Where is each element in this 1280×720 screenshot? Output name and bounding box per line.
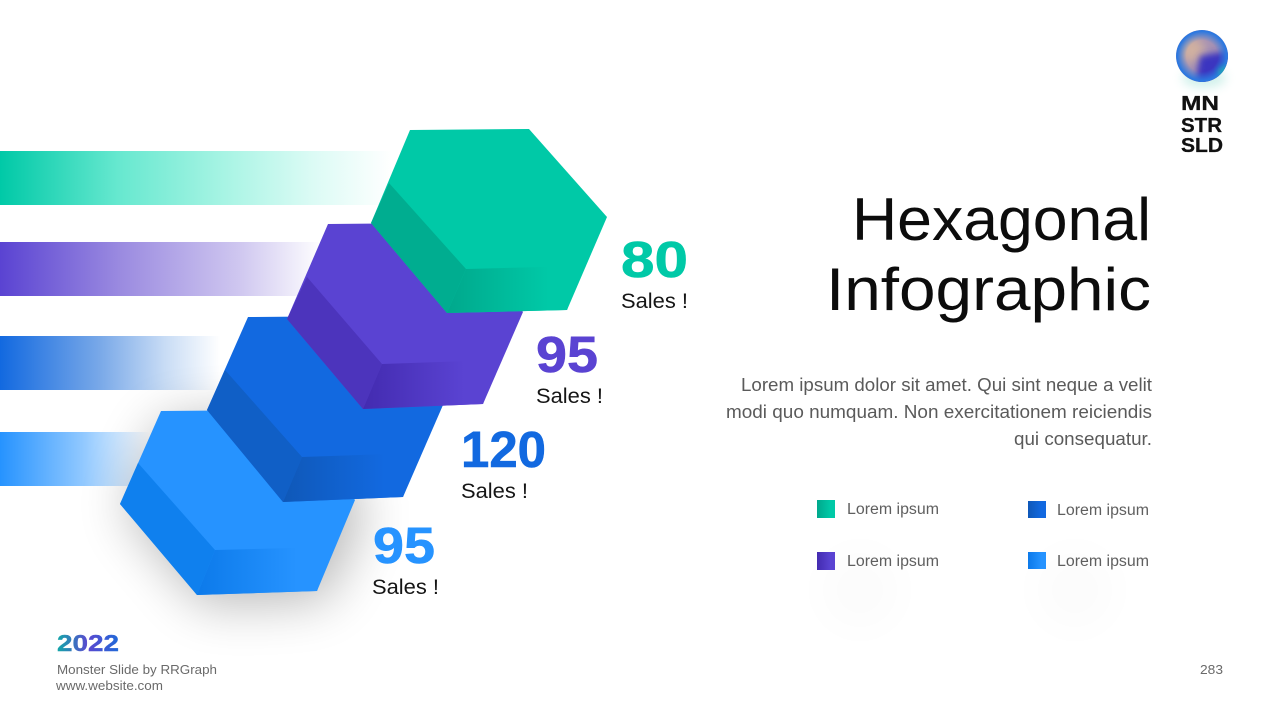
value: 120 sales: Sales ! bbox=[461, 480, 528, 503]
value: 95 sales purple: 95 bbox=[536, 326, 598, 383]
value: 95 sales purple bbox=[536, 326, 603, 408]
legend item: purple bbox=[817, 552, 939, 570]
hexagon: green bbox=[371, 129, 607, 313]
legend item: blue: Lorem ipsum bbox=[1057, 502, 1149, 519]
hexagon shadow bbox=[125, 415, 365, 605]
stripe: purple bbox=[0, 242, 322, 296]
value: 80 sales bbox=[621, 231, 688, 313]
title: Infographic bbox=[826, 256, 1151, 323]
logo text: MN bbox=[1181, 93, 1219, 115]
legend item: purple: Lorem ipsum bbox=[847, 553, 939, 570]
value: 120 sales bbox=[461, 421, 546, 503]
stripe: blue bbox=[0, 336, 220, 390]
value: 95 sales purple: Sales ! bbox=[536, 385, 603, 408]
value: 95 sales light blue bbox=[372, 517, 439, 599]
footer: credits: Monster Slide by RRGraph bbox=[57, 662, 217, 677]
footer: credits bbox=[55, 662, 217, 693]
faint shadows below legend bbox=[818, 548, 1117, 632]
value: 95 sales light blue: Sales ! bbox=[372, 576, 439, 599]
hexagon: purple bbox=[287, 223, 523, 409]
legend item: light blue: Lorem ipsum bbox=[1057, 553, 1149, 570]
value: 120 sales: 120 bbox=[461, 421, 546, 478]
logo bbox=[1176, 30, 1232, 157]
legend item: green bbox=[817, 500, 939, 518]
value: 80 sales: Sales ! bbox=[621, 290, 688, 313]
title: Hexagonal bbox=[852, 186, 1151, 253]
value: 80 sales: 80 bbox=[621, 231, 688, 288]
legend item: light blue bbox=[1028, 552, 1149, 570]
footer: year: 2022 bbox=[57, 630, 119, 656]
value: 95 sales light blue: 95 bbox=[373, 517, 435, 574]
legend item: blue bbox=[1028, 501, 1149, 519]
stripe: light blue bbox=[0, 432, 150, 486]
legend item: green: Lorem ipsum bbox=[847, 501, 939, 518]
footer: credits: www.website.com bbox=[55, 678, 163, 693]
logo text: STR bbox=[1181, 115, 1223, 137]
page number: 283 bbox=[1200, 662, 1223, 677]
logo text: SLD bbox=[1181, 135, 1223, 157]
legend bbox=[817, 500, 1149, 570]
title bbox=[826, 186, 1151, 323]
body text: modi quo numquam. Non exercitationem reiciendis bbox=[726, 401, 1152, 422]
icon: gradient sphere bbox=[1176, 30, 1232, 90]
stripe: green bbox=[0, 151, 392, 205]
hexagon: blue bbox=[207, 316, 443, 502]
body text: Lorem ipsum dolor sit amet. Qui sint neque a velit bbox=[741, 374, 1152, 395]
body text bbox=[726, 374, 1152, 449]
logo text bbox=[1181, 93, 1223, 157]
hexagon: light blue bbox=[120, 410, 355, 595]
body text: qui consequatur. bbox=[1014, 428, 1152, 449]
